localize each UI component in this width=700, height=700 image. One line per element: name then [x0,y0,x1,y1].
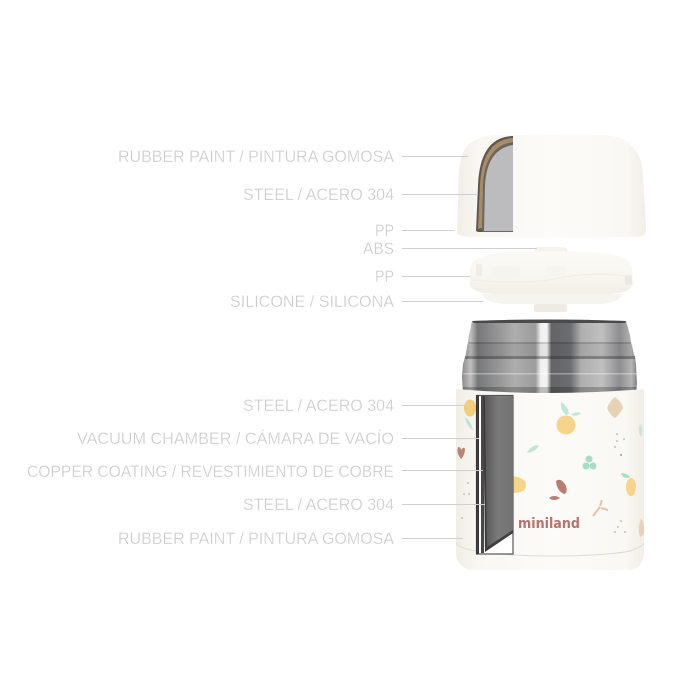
lid cutaway inner steel [482,142,513,232]
lid with cutaway [457,135,646,238]
label: vacuum chamber: VACUUM CHAMBER / CÁMARA DE VACÍO [77,429,394,448]
teal leaf right [639,424,642,437]
orange center clipped [513,476,526,493]
cutaway frame [476,396,513,554]
brand logo: miniland [518,516,580,532]
heart leaf [457,447,465,459]
lower ring [462,357,637,396]
label: rubber paint body: RUBBER PAINT / PINTURA GOMOSA [118,530,394,548]
label: PP lid: PP [375,222,394,240]
orange top [556,416,576,434]
teal leaf [527,445,539,453]
labels: lid [118,148,394,311]
leader lines [402,156,537,538]
copper and vacuum wall [481,396,484,553]
label: steel lid: STEEL / ACERO 304 [243,186,394,204]
outer steel wall [476,395,479,554]
steel neck [462,320,637,396]
cap body [470,251,633,294]
orange left [464,400,476,416]
dots [461,433,626,533]
tan leaf [607,397,623,418]
silicone flange [482,294,622,304]
brown leaves [556,480,567,494]
bottom band line [456,543,644,556]
decorative pattern [457,397,644,537]
label: rubber paint lid: RUBBER PAINT / PINTURA GOMOSA [118,148,394,166]
inner steel [484,396,513,550]
pale sprig [593,500,608,516]
ABS top nub [535,247,567,254]
body cutaway [476,395,513,554]
lid shell [457,135,646,238]
label: PP cap: PP [375,268,394,286]
silicone bottom nub [534,304,567,312]
orange right [626,478,636,496]
clover [582,456,596,470]
label: steel outer: STEEL / ACERO 304 [243,397,394,415]
neck shading [472,320,626,323]
label: ABS: ABS [363,240,394,258]
inner cap [470,247,633,312]
labels: body [27,397,394,548]
body shell [456,389,644,570]
tan leaf lower right [639,518,644,537]
label: steel inner: STEEL / ACERO 304 [243,496,394,514]
label: silicone: SILICONE / SILICONA [230,293,394,311]
label: copper coating: COPPER COATING / REVESTIMIENTO DE COBRE [27,463,394,481]
thermos body [456,389,644,570]
upper ring [465,320,635,358]
lid cutaway wall [476,136,513,232]
